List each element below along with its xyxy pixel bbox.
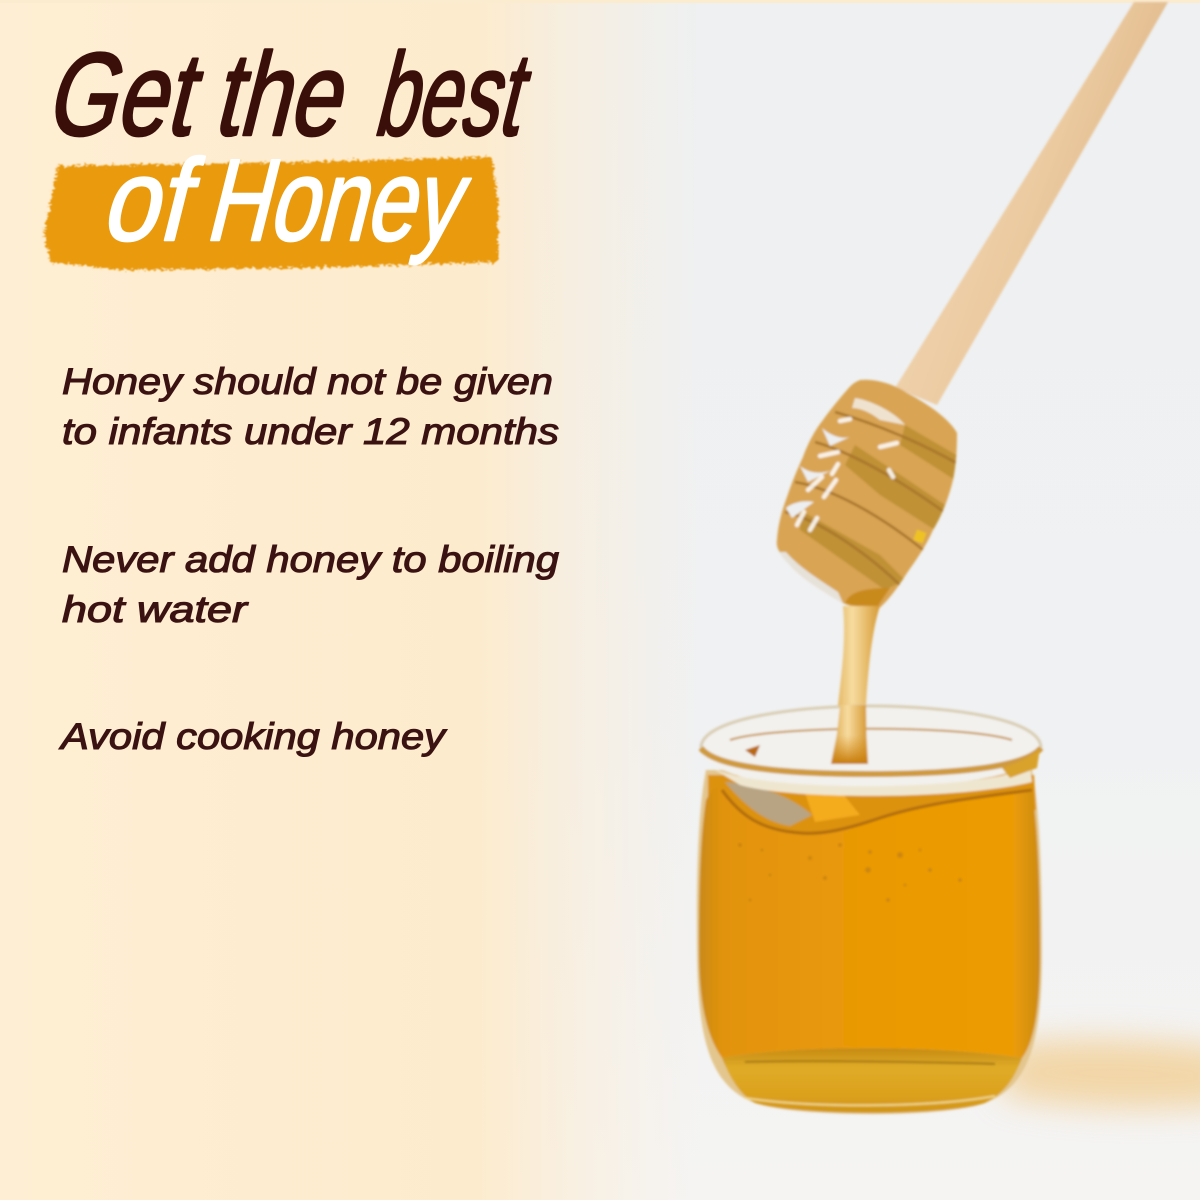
honey bubbles: [738, 843, 962, 902]
glass jar: [697, 705, 1042, 1114]
surface line: [722, 790, 1032, 833]
left notches: [786, 428, 852, 518]
dipper grooves: [785, 412, 960, 590]
honey fill: [699, 787, 1040, 1058]
title: Get the best: the: [206, 30, 363, 161]
tip 3: Avoid cooking honey: [59, 716, 448, 757]
title: Get the best: [38, 30, 543, 161]
title: Get the best: best: [366, 30, 543, 161]
title text: of Honey: of: [94, 135, 211, 265]
dipper highlights: [797, 419, 897, 530]
tip 2: Never add honey to boiling: [62, 539, 559, 580]
title text: of Honey: [94, 135, 482, 265]
dipper head: [777, 380, 960, 611]
clear neck band: [712, 768, 1032, 796]
drip inside jar: [832, 705, 867, 764]
brush stroke highlight: [44, 157, 498, 270]
back honey surface: [708, 775, 1036, 840]
jar shadow: [1000, 1040, 1200, 1108]
jar base: [722, 1048, 1022, 1113]
honey coating patches: [800, 425, 958, 590]
honey dipper: [777, 2, 1168, 765]
honey drip: [830, 606, 880, 765]
dipper handle: [895, 2, 1168, 405]
highlighted title: of Honey: [44, 135, 498, 270]
tip 1: to infants under 12 months: [62, 411, 559, 452]
tip 2: hot water: [62, 589, 249, 630]
jar rim: [701, 706, 1041, 788]
title: Get the best: Get: [38, 30, 215, 161]
jar glass body: [697, 770, 1042, 1114]
title text: of Honey: Honey: [198, 135, 482, 265]
tip 1: Honey should not be given: [62, 361, 553, 402]
